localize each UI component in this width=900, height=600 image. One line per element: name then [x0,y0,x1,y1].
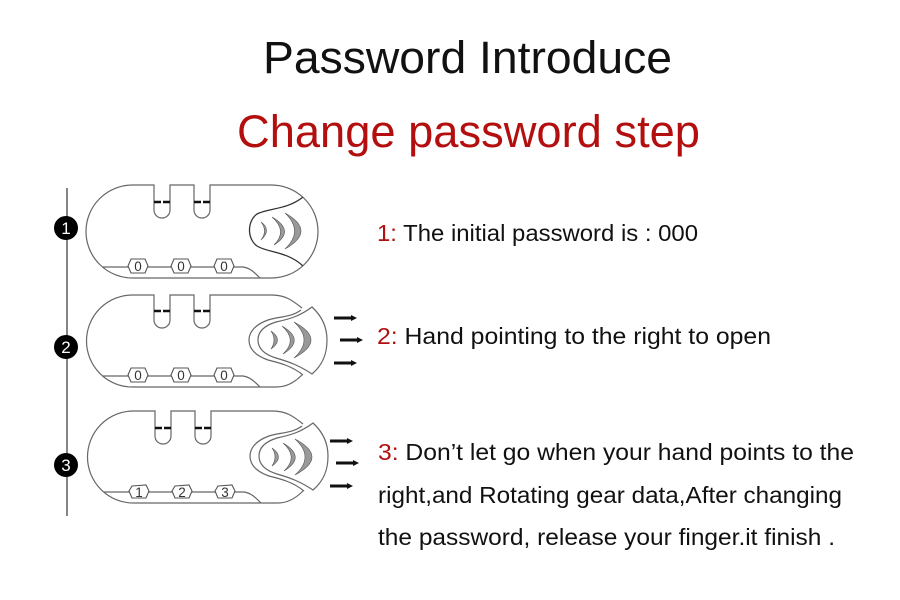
arrows: step 3 [330,438,359,489]
step badge 3: 3 [61,456,71,475]
lock diagram 3: digits changed: 1 [135,485,143,500]
lock diagram 3: digits changed: 2 [178,485,186,500]
step 3 text [378,439,854,550]
lock diagram 2: latch pulled: 0 [134,368,142,383]
lock diagram 2: latch pulled [86,295,327,387]
timeline line [66,188,68,516]
lock diagram 1: closed [86,185,318,278]
step badge 1: 1 [61,219,71,238]
step badge 1 [54,216,78,240]
step badge 2 [54,335,78,359]
arrows: step 2 [334,315,363,366]
step 1 text: 1: The initial password is : 000 [377,220,698,246]
lock diagram 2: latch pulled: 0 [177,368,185,383]
subtitle: Change password step [237,106,700,157]
step 2 text: 2: Hand pointing to the right to open [377,323,771,349]
lock diagram 1: closed: 0 [177,259,185,274]
lock diagram 1: closed: 0 [220,259,228,274]
title: Password Introduce [263,32,672,83]
lock diagram 1: closed: 0 [134,259,142,274]
step badge 3 [54,453,78,477]
step badge 2: 2 [61,338,71,357]
lock diagram 3: digits changed [88,411,328,503]
step 3 text: right,and Rotating gear data,After changing [378,482,842,508]
lock diagram 2: latch pulled: 0 [220,368,228,383]
lock diagram 3: digits changed: 3 [221,485,229,500]
step 3 text: 3: Don’t let go when your hand points to the [378,439,854,465]
step 3 text: the password, release your finger.it finish . [378,524,835,550]
